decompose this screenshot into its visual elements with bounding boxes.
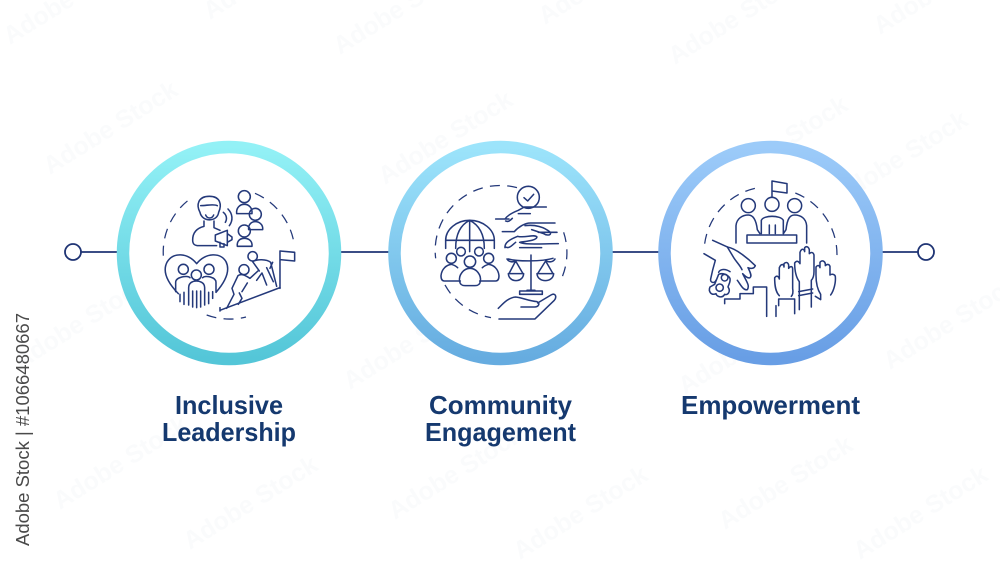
watermark pattern: Adobe Stock (383, 420, 528, 525)
stock id caption: Adobe Stock | #1066480667 (13, 313, 33, 546)
ring: community engagement (394, 147, 606, 359)
watermark pattern: Adobe Stock (848, 460, 993, 562)
ring: inclusive leadership (123, 147, 335, 359)
watermark pattern: Adobe Stock (48, 410, 193, 515)
label: inclusive leadership: Inclusive (175, 390, 283, 420)
icon: empowerment (704, 181, 837, 316)
watermark pattern: Adobe Stock (713, 430, 858, 535)
watermark pattern: Adobe Stock (708, 90, 853, 195)
watermark pattern: Adobe Stock (8, 270, 153, 375)
label: inclusive leadership (162, 390, 296, 447)
label: community engagement (425, 390, 576, 447)
label: community engagement: Community (429, 390, 573, 420)
label: community engagement: Engagement (425, 417, 576, 447)
ring: empowerment (664, 147, 876, 359)
watermark pattern: Adobe Stock (373, 85, 518, 190)
watermark pattern: Adobe Stock (673, 295, 818, 400)
watermark pattern: Adobe Stock (38, 75, 183, 180)
icon: community engagement (435, 185, 567, 319)
watermark pattern: Adobe Stock (508, 460, 653, 562)
connector timeline (65, 244, 934, 260)
watermark pattern: Adobe Stock (178, 450, 323, 555)
label: empowerment: Empowerment (681, 390, 860, 420)
watermark pattern: Adobe Stock (338, 290, 483, 395)
icon: inclusive leadership (163, 191, 295, 319)
label: inclusive leadership: Leadership (162, 417, 296, 447)
watermark pattern: Adobe Stock (828, 105, 973, 210)
